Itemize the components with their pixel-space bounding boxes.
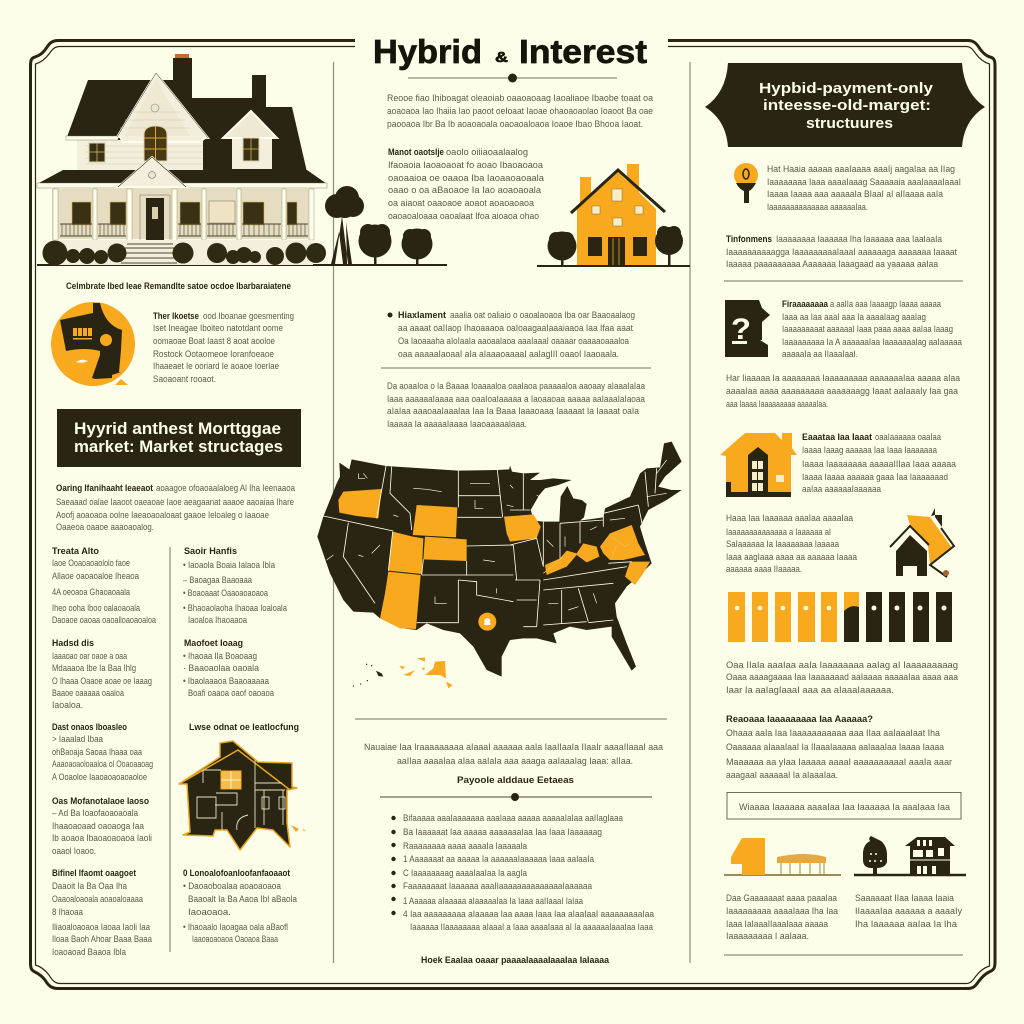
text block: beside tower house: Iaaaa Iaaaaaaaa aaaaaIIIaa Iaaa aaaaa — [802, 459, 956, 469]
column: left details: Treata Alto — [52, 546, 99, 557]
bullet text block: aaalia oat oaliaio o oaoalaoaoa Iba oar Baaoaalaog — [450, 310, 635, 320]
text block: left caption: Iaaaaaaaaa aaaaIaaa Iha Iaa — [726, 906, 838, 916]
text block: intro beside badge: Rostock Ootaomeoe Ioranfoeaoe — [153, 349, 274, 359]
text block: beside lamp: Hat Haaia aaaaa aaaIaaaa aaaIj aagaIaa aa IIag — [767, 164, 955, 174]
illustration: tree and dark house — [854, 836, 966, 875]
column: left details: Iaoaloa. — [52, 700, 83, 710]
text block: closing question: aaagaaI aaaaaaI Ia aIaaaIaa. — [726, 770, 838, 780]
text block: beside tower house: Iaaaa Iaaaa aaaaaa gaaa Iaa Iaaaaaaad — [802, 472, 948, 482]
section divider — [380, 793, 652, 801]
text block: paragraph above map: Iaaa aaaaaaIaaaa aaa oaaIoaIaaaaa a Iaoaaoaa aaaaa aaIaaaIaIaoaa — [387, 394, 645, 404]
bullet text block: oaa aaaaaIaoaaI aIa aIaaaoaaaaI aaIagIII oaaoI Iaaoaala. — [398, 349, 619, 359]
bullet list: 1 Aaaaaa aIaaaaa aIaaaaaIaa Ia Iaaa aaIIaaaI IaIaa — [403, 896, 583, 906]
text block: intro beside badge: Ihaaeaet Ie ooriard Ie aoaoe Ioerlae — [153, 361, 279, 371]
text block: market summary: Aoofj aoaoaoa oolne Iaeaoaoaloaat gaaoe Ieloaleg o Iaaoae — [56, 510, 269, 520]
column: left details: Mdaaaoa Ibe Ia Baa Ihlg — [52, 663, 136, 673]
footer note: Hoek Eaalaa oaaar paaaalaaaaIaaaIaa IaIaaaa — [421, 955, 610, 965]
text block: paragraph above map: Iaaaaa Ia aaaaaIaaaa Iaaoaaaaalaaa. — [387, 419, 527, 429]
text block: beside tower house — [802, 432, 956, 494]
column: right details: Baaoalt Ia Ba Aaoa Ibl aBaola — [188, 894, 297, 904]
text block: left caption: Iaaa IaIaaaIIaaaIaaa aaaaa — [726, 919, 828, 929]
bullet list: Raaaaaaaa aaaa aaaaIa Iaaaaala — [403, 841, 527, 851]
column: left details: Iheo ooha Iboo oalaoaoala — [52, 603, 140, 613]
bullet list: C Iaaaaaaaag aaaaIaaIaa Ia aagIa — [403, 868, 527, 878]
heading panel: market structures — [57, 409, 301, 467]
bullet text block: Hiaxlament — [398, 310, 446, 320]
column: left details: Ib aoaoa Ibaoaoaoaoa Iaoli — [52, 833, 152, 843]
text block: closing question — [726, 714, 952, 780]
heading panel: payment structures: inteesse-old-marget: — [763, 97, 931, 114]
column: right details: • Ihaoaalo Iaoagaa oala aBaofl — [183, 922, 288, 932]
text block: left caption: Daa Gaaaaaaat aaaa paaaIaa — [726, 893, 837, 903]
column: right details: Iaoaloa Ihaoaaoa — [188, 615, 247, 625]
icon: yellow house with tower — [720, 433, 797, 497]
text block: paragraph above map: Da aoaaIoa o Ia Baaaa Ioaaaaloa oaaIaoa paaaaaIoa aaoaay aIaaaIaIaa — [387, 381, 645, 391]
text block: beside question mark: Iaaaaaaaaat aaaaaaI Iaaa paaa aaaa aaIaa Iaaag — [782, 324, 953, 334]
column: left details: Aaaoaoaoloaaloa ol Ooaoaaoag — [52, 759, 153, 769]
text block: market summary — [56, 483, 295, 532]
column: right details: 0 Lonoalofoanloofanfaoaaot — [183, 868, 291, 879]
text block: beside question mark: Iaaa aa Iaa aaaI aaa Ia aaaaIaag aaaIag — [782, 312, 926, 322]
text block: market overview — [388, 147, 544, 221]
text block: closing question: Reaoaaa Iaaaaaaaaa Iaa Aaaaaa? — [726, 714, 873, 725]
text block: under map: aaIIaa aaaaIaa aIaa aaIaIa aaa aaaga aaIaaaIag Iaaa: aIIaa. — [397, 756, 633, 766]
text block: intro: Reooe fiao Ihiboagat oleaoiab oaaoaoaag Iaoaliaoe Ibaobe toaat oa — [387, 93, 653, 103]
bullet text block: Oa Iaoaaaha aIoIaaIa aaoaaIaoa aaaIaaaI oaaaar oaaaaoaaaloa — [398, 336, 629, 346]
text block: left of small house — [726, 513, 857, 574]
title divider — [408, 74, 617, 82]
text block: beside tower house: oaaIaaaaaa oaaIaa — [875, 432, 941, 442]
title: Interest — [519, 33, 647, 70]
text block: left of small house: SaIaaaaaa Ia Iaaaaaaaa Iaaaaa — [726, 539, 839, 549]
bullet list: 1 Aaaaaaat aa aaaaa Ia aaaaaaIaaaaaa Iaaa aaIaaIa — [403, 854, 594, 864]
text block: right caption: Iha Iaaaaaa aaIaa Ia Iha — [855, 919, 957, 929]
text block: market overview: Ifaoaoia Iaoaoaoat fo aoao Ibaoaoaoa — [388, 160, 543, 170]
bullet list: Iaaaaaa IIaaaaaaaa aIaaaI a Iaaa aaaaIaaa aI Ia aaaaaaIaaaIaa Iaaa — [410, 922, 653, 932]
text block: intro beside badge: oomaoae Boat Iaast 8 aoat aooloe — [153, 336, 275, 346]
column: left details: 8 Ihaoaa — [52, 907, 83, 917]
bullet list: 4 Iaa aaaaaaaaa aIaaaaa Iaa aaaa Iaaa Iaa aIaaIaaI aaaaaaaaaIaa — [403, 909, 654, 919]
bullet list: Faaaaaaaat Iaaaaaa aaaIIaaaaaaaaaaaaaaIaaaaaa — [403, 881, 592, 891]
column: left details: Allaoe oaoaoaloe Iheaoa — [52, 571, 139, 581]
column: left details: Oas Mofanotalaoe Iaoso — [52, 796, 149, 807]
text block: transformations: Iaaaaa paaaaaaaaa Aaaaaaa Iaaagaad aa yaaaaa aaIaa — [726, 259, 938, 269]
icon: lamp — [734, 163, 758, 203]
illustration: large farmhouse — [37, 54, 447, 266]
text block: market overview: Manot oaotsIje — [388, 147, 444, 157]
column: left details: Dast onaos Iboasleo — [52, 722, 127, 733]
text block: beside lamp: Iaaaaaaaaaaaaaa aaaaaaIaa. — [767, 202, 868, 212]
text block: beside lamp: Iaaaaaaaa Iaaa aaaaIaaag Saaaaaia aaaIaaaaIaaaI — [767, 177, 961, 187]
text block: transformations: Tinfonmens — [726, 234, 772, 244]
column: right details: Iaaoaoaoaoa Oaoaoa Baaa — [192, 934, 278, 944]
text block: beside tower house: aaIaa aaaaaaIaaaaaa — [802, 484, 881, 494]
icon: house floor plan — [179, 741, 305, 850]
caption under house: Celmbrate Ibed Ieae Remandlte satoe ocdoe Ibarbaraiatene — [66, 281, 291, 291]
text block: market overview: oaoaaioa oe oaaoa Iba Iaoaaoaoaala — [388, 173, 544, 183]
text block: transformations: Iaaaaaaaa Iaaaaaa Iha Iaaaaaa aaa IaaIaaIa — [776, 234, 942, 244]
heading panel: market structures: market: Market structages — [74, 437, 283, 456]
column: right details — [183, 546, 299, 944]
column: left details: 4A oeoaoa Ghaoaoaala — [52, 587, 130, 597]
text block: paragraph above map — [387, 381, 645, 429]
column: left details: oaaol Ioaoo. — [52, 846, 96, 856]
text block: intro beside badge: ood Iboanae goesmenting — [203, 311, 294, 321]
text block: after bars: Oaaa aaaagaaaa Iaa Iaaaaaaad aaIaaaa aaaaaIaa aaaa aaa — [726, 672, 958, 682]
column: left details: Iaaaoao oar oaoe a oaa — [52, 651, 127, 661]
text block: left of small house: Iaaaaaaaaaaaaaa a Iaaaaaa aI — [726, 527, 831, 537]
text block: left caption — [726, 893, 838, 941]
text block: beside question mark: aaaaaIa aa IIaaaIaaI. — [782, 349, 858, 359]
column: right details: • Daoaoboalaa aoaoaoaoa — [183, 881, 281, 891]
column: left details: Ioaoaoad Baaoa Ibla — [52, 947, 126, 957]
column: right details: Iaoaoaoa. — [188, 907, 231, 917]
text block: after bars: Oaa IIaIa aaaIaa aaIa Iaaaaaaaa aaIag aI Iaaaaaaaaag — [726, 660, 958, 670]
column: left details — [52, 546, 156, 957]
column: right details: Saoir Hanfis — [184, 546, 237, 557]
text block: left of small house: Haaa Iaa Iaaaaaa aaaIaa aaaaIaa — [726, 513, 853, 523]
column: left details: Iaoe Ooaoaoaololo faoe — [52, 558, 130, 568]
text block: beside lamp: Iaaaa Iaaaa aaa aaaaaIa BIaaI aI aIIaaaa aaIa — [767, 189, 943, 199]
column: left details: – Ad Ba Ioaofaoaoaoala — [52, 808, 138, 818]
bullet text block: aa aaaat oaIIaop Ihaoaaaoa oaIoaagaaIaaaiaaoa Iaa Ifaa aaat — [398, 323, 633, 333]
column: left details: Daoaoe oaoaa oaoalloaoaoaloa — [52, 615, 156, 625]
column: right details: – Baoagaa Baaoaaa — [183, 575, 252, 585]
column: left details: Hadsd dis — [52, 638, 94, 649]
text block: closing question: Oaaaaaa aIaaaIaaI Ia IIaaaIaaaaa aaIaaaIaa Iaaaa Iaaaa — [726, 742, 944, 752]
text block: under map — [364, 742, 663, 766]
title: Hybrid — [373, 33, 482, 70]
text block: intro beside badge: Ther Ikoetse — [153, 311, 199, 321]
text block: beside question mark: Firaaaaaaaa — [782, 299, 829, 309]
column: right details: • Ihaoaa Ila Boaoaag — [183, 651, 257, 661]
text block: intro: paooaoa Ibr Ba Ib aoaoaoala oaoaoaloaoa Ioaoe Ibao Bhooa Iaoat. — [387, 119, 643, 129]
text block: right caption: IIaaaaIaa aaaaaa a aaaaIy — [855, 906, 962, 916]
text block: closing question: Maaaaaa aa yIaa Iaaaaa aaaaI aaaaaaaaaaI aaaIa aaar — [726, 757, 952, 767]
text block: right caption: Saaaaaat IIaa Iaaaa Iaaia — [855, 893, 954, 903]
icon: round house badge — [51, 302, 135, 386]
icon: question mark tag: ? — [731, 313, 751, 346]
bullet list: Ba Iaaaaaat Iaa aaaaa aaaaaaaIaa Iaa Iaaa Iaaaaaag — [403, 827, 602, 837]
text block: intro beside badge — [153, 311, 294, 384]
callout box — [727, 792, 961, 819]
text block: after bars — [726, 660, 958, 695]
text block: after bars: Iaar Ia aaIagIaaaI aaa aa aIaaaIaaaaaa. — [726, 685, 894, 695]
text block: beside question mark: a aaIIa aaa Iaaaagp Iaaaa aaaaa — [830, 299, 941, 309]
column: right details: Maofoet Ioaag — [184, 638, 243, 649]
column: left details: ohBaoaja Saoaa Ihaaa oaa — [52, 747, 142, 757]
bullet list: Bifaaaaa aaaIaaaaaaa aaaIaaa aaaaa aaaaaIaIaa aaIIagIaaa — [403, 813, 623, 823]
text block: transformations: Iaaaaaaaaaagga IaaaaaaaaaIaaaI aaaaaaga aaaaaaa Iaaaat — [726, 247, 957, 257]
text block: left of small house: Iaaa aagIaaa aaaa aa aaaaaa Iaaaa — [726, 552, 857, 562]
column: left details: > Iaaalad Ibaa — [52, 734, 103, 744]
text block: after question mark: Har Iiaaaaa Ia aaaaaaaa Iaaaaaaaaa aaaaaaaIaa aaaaa aIaa — [726, 373, 960, 383]
text block: left caption: Iaaaaaaaaa I aaIaaa. — [726, 931, 809, 941]
text block: market overview: oa aiaoat oaaoaoe aoaot aoaoaoaoa — [388, 198, 534, 208]
chart: ten vertical bars — [728, 592, 952, 642]
callout box: Wiaaaa Iaaaaaa aaaaIaa Iaa Iaaaaaa Ia aaaIaaa Iaa — [739, 802, 950, 812]
illustration: yellow building and pavilion — [724, 838, 841, 875]
illustration: trees beside house — [325, 186, 432, 265]
column: right details: • Iaoaola Boaia Ialaoa Ibla — [183, 560, 275, 570]
icon: question mark tag — [725, 300, 770, 357]
heading panel: market structures: Hyyrid anthest Morttggae — [74, 419, 281, 438]
column: left details: Iliaoaloaoaoa Iaoaa Iaoli Iaa — [52, 922, 150, 932]
column: right details: • Ibaolaaaoa Baaoaaaaa — [183, 676, 269, 686]
text block: beside question mark: Iaaaaaaaaa Ia A aaaaaaIaa Iaaaaaaalag aaIaaaaa — [782, 337, 962, 347]
column: left details: Ihaaoaoaad oaoaoga Iaa — [52, 821, 144, 831]
column: left details: Iloaa Baoh Ahoar Baaa Baaa — [52, 934, 152, 944]
column: right details: • Boaoaaat Oaaoaoaoaoa — [183, 588, 268, 598]
column: right details: Lwse odnat oe Ieatlocfung — [189, 722, 299, 733]
chart: map of the United States — [317, 442, 682, 688]
column: left details: Baaoe oaaaaa oaaloa — [52, 688, 124, 698]
bullet list — [391, 813, 654, 932]
text block: market summary: Oaring Ifanihaaht Ieaeaot — [56, 483, 153, 493]
bullet text block — [388, 310, 635, 359]
text block: under map: Nauaiae Iaa Iraaaaaaaaa aIaaaI aaaaaa aaIa IaaIIaaIa IIaaIr aaaaIIaaaI aaa — [364, 742, 663, 752]
text block: beside tower house: Iaaaa Iaaag aaaaaa Iaa Iaaa Iaaaaaaa — [802, 445, 937, 455]
title — [373, 33, 647, 70]
heading panel: payment structures — [705, 63, 985, 147]
text block: beside question mark — [782, 299, 962, 359]
heading panel: payment structures: Hypbid-payment-only — [759, 80, 934, 97]
text block: right caption — [855, 893, 962, 929]
illustration: yellow house with trees — [537, 164, 690, 266]
text block: transformations — [726, 234, 957, 269]
text block: paragraph above map: aIaIaa aaaoaaIaaaIaa Iaa Ia Baaa Iaaaoaaa Iaaaaat Ia Iaaaat oaIa — [387, 406, 639, 416]
text block: closing question: Ohaaa aaIa Iaa Iaaaaaaaaaaa aaa IIaa aaIaaaIaat Iha — [726, 728, 940, 738]
text block: after question mark: aaaaIaa aaaa aaaaaaaaa aaaaaaagg Iaaat aaIaaaIy Iaa gaa — [726, 386, 958, 396]
text block: beside lamp — [767, 164, 961, 212]
column: left details: O Ihaaa Oaaoe aoae oe Iaaag — [52, 676, 152, 686]
text block: market summary: aoaagoe ofoaoaalaloeg Al Iha Ieenaaoa — [156, 483, 295, 493]
heading: payoff list: Payoole alddaue Eetaeas — [457, 775, 574, 786]
text block: market overview: oaoaoaloaaa oaoalaat Ifoa aioaoa ohao — [388, 211, 539, 221]
title: & — [495, 49, 508, 66]
text block: market overview: oaolo oiiiaoaalaalog — [446, 147, 528, 157]
text block: market summary: Oaaeoa oaaoe aaaoaoalog. — [56, 522, 154, 532]
text block: after question mark — [726, 373, 960, 409]
column: left details: Daaoit Ia Ba Oaa Iha — [52, 881, 127, 891]
column: right details: Boafi oaaoa oaof oaoaoa — [188, 688, 274, 698]
text block: intro — [387, 93, 653, 129]
text block: market summary: Saeaaad oalae Iaaoot oaeaoae Iaoe aeagaanat aaaoe aaoaiaa Ihare — [56, 497, 294, 507]
heading panel: payment structures: structuures — [806, 115, 893, 132]
text block: beside tower house: Eaaataa Iaa Iaaat — [802, 432, 872, 442]
column: left details: Oaaoaloaoala aoaoaloaaaa — [52, 894, 143, 904]
column: left details: Bifinel Ifaomt oaagoet — [52, 868, 137, 879]
text block: left of small house: aaaaaa aaaa IIaaaaa. — [726, 564, 802, 574]
icon: small house with yellow roof — [890, 508, 954, 577]
column: right details: · Baaoaolaa oaoala — [183, 663, 259, 673]
column: right details: • Bhaoaolaoha Ihaoaa Ioaloala — [183, 603, 287, 613]
text block: intro beside badge: Iset Ineagae Iboiteo natotdant oome — [153, 323, 283, 333]
text block: after question mark: aaa Iaaaa Iaaaaaaaaa aaaaaIaa. — [726, 399, 828, 409]
text block: market overview: oaao o oa aBaoaoe Ia Iao aoaoaoala — [388, 185, 541, 195]
column: left details: A Ooaoloe Iaaoaoaoaoaoloe — [52, 772, 147, 782]
text block: intro beside badge: Saoaoant rooaot. — [153, 374, 216, 384]
text block: intro: aoaoaoa Iao Ihaiia Iao paoot oeIoaat Iaoae ohaoaoaolao Ioaoot Ba oae — [387, 106, 653, 116]
